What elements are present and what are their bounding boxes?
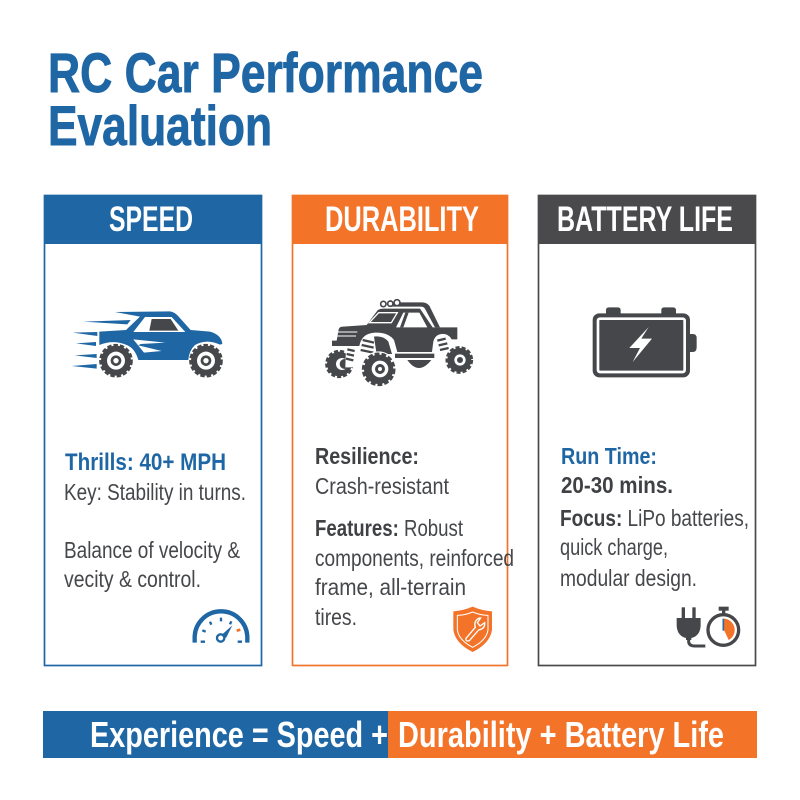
text: speed details: vecity & control. <box>64 566 201 592</box>
icon: shield with wrench <box>453 607 492 652</box>
text: durability details: components, reinforced <box>315 545 514 571</box>
header: battery life <box>538 195 756 244</box>
text: battery details: Run Time: <box>561 443 657 469</box>
header: durability <box>292 195 508 244</box>
text: durability details: frame, all-terrain <box>315 574 466 600</box>
title: Evaluation <box>48 94 272 157</box>
text: battery details <box>560 443 749 591</box>
banner: experience formula <box>43 711 757 758</box>
panel: durability <box>292 195 514 666</box>
text: speed details: Thrills: 40+ MPH <box>65 449 226 476</box>
text: durability details: tires. <box>315 604 357 630</box>
text: battery details: Focus: LiPo batteries, <box>560 505 749 531</box>
panel: battery life <box>538 195 756 666</box>
text: durability details <box>315 443 514 630</box>
text: durability details: Crash-resistant <box>315 473 450 499</box>
text: battery details: quick charge, <box>560 534 668 560</box>
icon: blue race truck <box>72 311 222 376</box>
text: battery details: 20-30 mins. <box>561 472 673 498</box>
header: speed <box>44 195 262 244</box>
icon: battery <box>593 307 697 377</box>
text: durability details: Resilience: <box>315 443 419 469</box>
text: speed details: Balance of velocity & <box>64 537 240 563</box>
banner: experience formula: Experience = Speed + <box>90 714 388 755</box>
icon: monster truck <box>327 300 475 387</box>
title: RC Car Performance <box>48 41 483 104</box>
text: durability details: Features: Robust <box>315 515 463 541</box>
header: speed: SPEED <box>109 200 193 239</box>
text: speed details <box>64 449 246 592</box>
banner: experience formula: Durability + Battery Life <box>398 714 724 755</box>
panel: speed <box>44 195 262 666</box>
icon: plug and stopwatch <box>677 607 739 646</box>
header: battery life: BATTERY LIFE <box>557 200 733 239</box>
text: speed details: Key: Stability in turns. <box>64 479 246 505</box>
header: durability: DURABILITY <box>325 200 479 239</box>
icon: speedometer <box>195 611 247 643</box>
title <box>48 41 483 157</box>
text: battery details: modular design. <box>560 565 697 591</box>
